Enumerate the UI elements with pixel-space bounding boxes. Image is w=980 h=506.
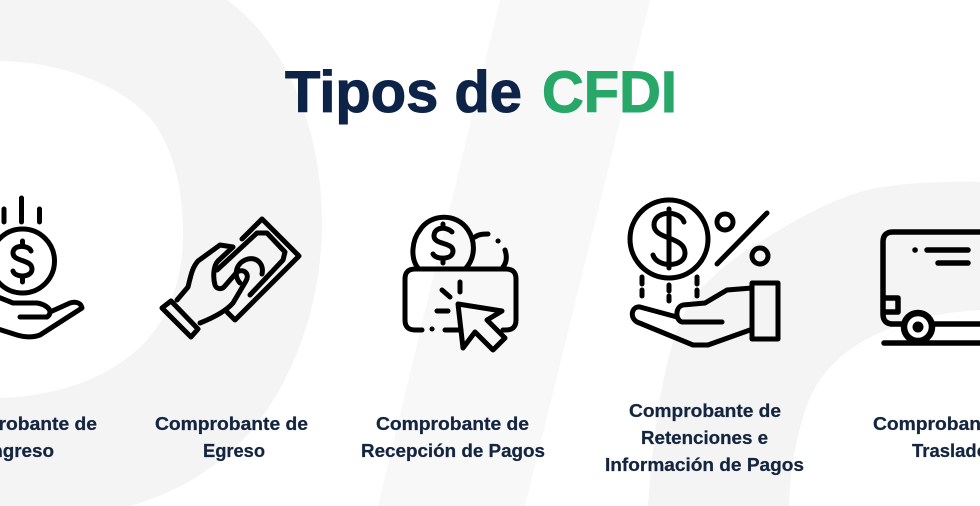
- title: Tipos de: [285, 60, 522, 125]
- label: Comprobante de Retenciones e Información de Pagos: Información de Pagos: [605, 455, 804, 475]
- label: Comprobante de Egreso: [155, 414, 308, 461]
- icon: payment click with coin: [405, 217, 516, 350]
- label: Comprobante de Ingreso: [0, 414, 97, 461]
- label: Comprobante de Recepción de Pagos: Recepción de Pagos: [361, 441, 545, 461]
- label: Comprobante de Recepción de Pagos: Comprobante de: [376, 414, 529, 434]
- label: Comprobante de Egreso: Comprobante de: [155, 414, 308, 434]
- label: Comprobante de Traslado: [873, 414, 980, 461]
- title: CFDI: [542, 60, 677, 125]
- label: Comprobante de Retenciones e Información de Pagos: [605, 401, 804, 475]
- label: Comprobante de Retenciones e Información de Pagos: Comprobante de: [629, 401, 781, 421]
- title: [285, 60, 677, 125]
- label: Comprobante de Retenciones e Información de Pagos: Retenciones e: [641, 428, 768, 448]
- icon: hand holding banknote: [162, 219, 299, 337]
- label: Comprobante de Egreso: Egreso: [203, 441, 265, 461]
- icon: hand receiving coin: [0, 198, 82, 337]
- icon: delivery truck: [883, 232, 980, 343]
- icon: hand with coin and percent: [630, 200, 778, 345]
- label: Comprobante de Recepción de Pagos: [361, 414, 545, 461]
